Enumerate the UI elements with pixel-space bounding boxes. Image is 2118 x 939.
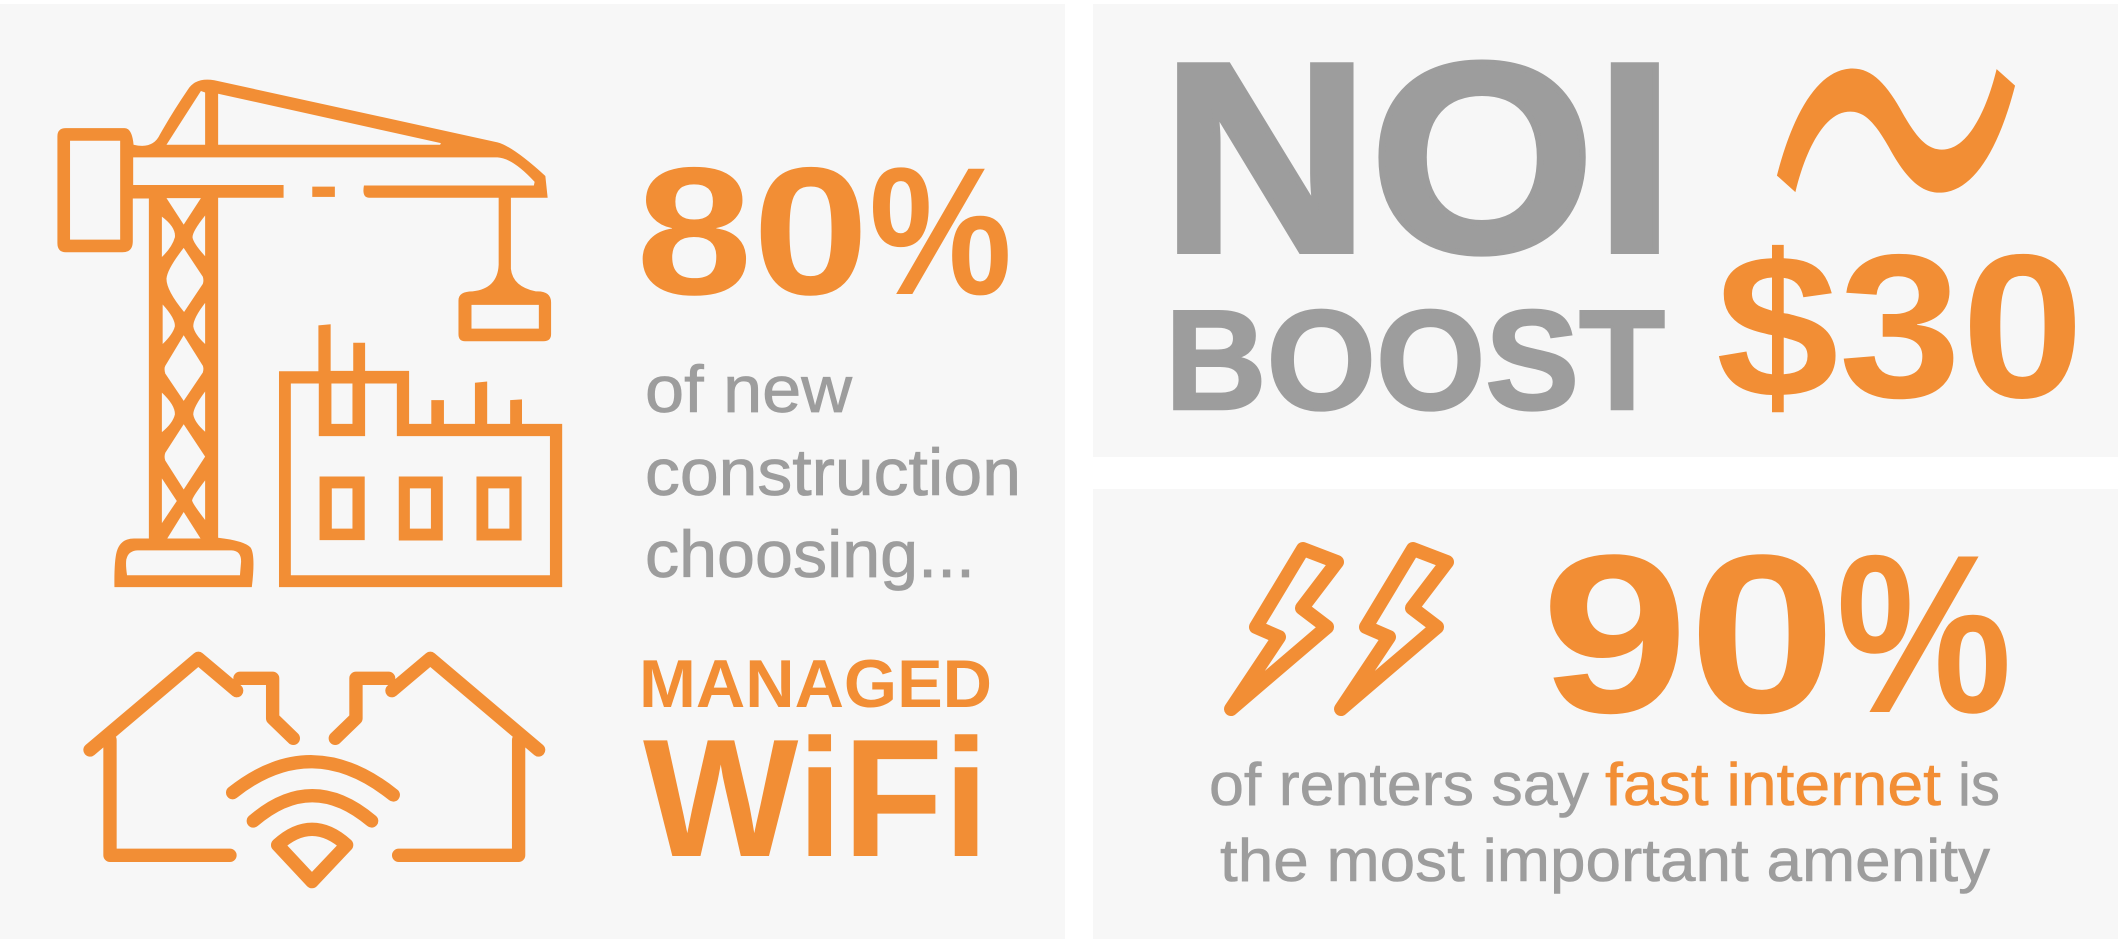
caption line 3: choosing...	[645, 517, 975, 591]
icon: crane and building	[57, 80, 562, 587]
caption: renters fast internet	[1209, 751, 2000, 894]
crane silhouette	[57, 80, 551, 587]
panel: fast internet	[1093, 489, 2118, 939]
left house	[90, 658, 293, 855]
caption part 2: is	[1958, 751, 2000, 818]
panel background: left	[0, 4, 1065, 939]
caption part 1: of renters say	[1209, 751, 1589, 818]
wifi fan	[278, 829, 347, 882]
caption highlight: fast internet	[1605, 751, 1941, 818]
caption line 2: construction	[645, 435, 1021, 509]
right house	[335, 658, 539, 855]
panel: NOI boost	[1093, 0, 2118, 511]
icon: two houses with wifi	[90, 658, 539, 882]
caption: of new construction choosing	[645, 352, 1021, 591]
percent sign: %	[869, 129, 1012, 333]
heading: BOOST: BOOST	[1165, 281, 1665, 440]
stat: 80%	[636, 129, 1012, 333]
label: WiFi: WiFi	[643, 704, 989, 892]
value: $30: $30	[1716, 212, 2084, 441]
building	[279, 324, 562, 587]
lightning bolt 2	[1341, 549, 1447, 709]
stat: 90%	[1541, 507, 2012, 760]
caption line 2: the most important amenity	[1220, 827, 1990, 894]
wifi arcs	[233, 762, 393, 821]
caption line 1: of new	[645, 352, 852, 426]
label: MANAGED: MANAGED	[639, 646, 992, 722]
building windows	[320, 476, 522, 541]
percent sign: %	[1836, 507, 2012, 760]
panel background: bottom right	[1093, 489, 2118, 939]
crane cut-outs	[70, 91, 539, 575]
digits 80: 80	[636, 129, 869, 333]
heading: NOI: NOI	[1161, 8, 1675, 309]
panel background: top right	[1093, 4, 2118, 457]
icon: lightning bolts	[1231, 549, 1447, 709]
crane dash	[312, 187, 335, 197]
panel: new construction	[0, 4, 1065, 939]
lightning bolt 1	[1231, 549, 1337, 709]
digits 90: 90	[1541, 507, 1836, 760]
